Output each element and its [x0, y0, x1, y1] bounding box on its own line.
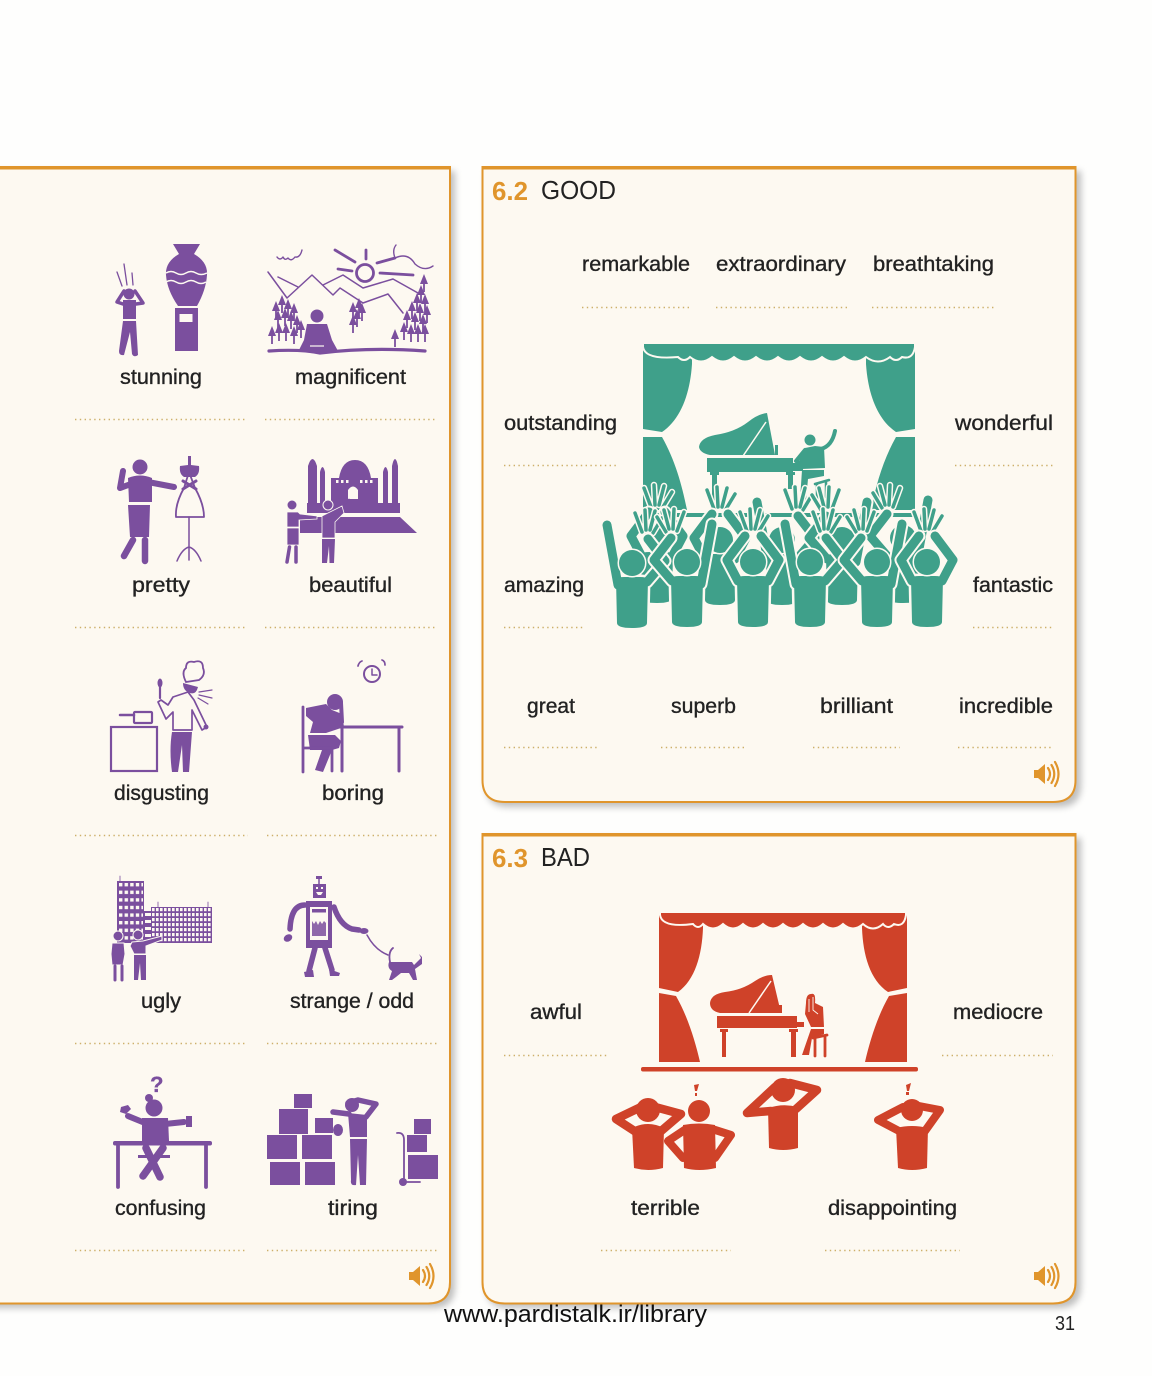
page number: 31: [1055, 1313, 1075, 1335]
panel: left vocabulary panel: [0, 166, 455, 1308]
grand piano: [699, 413, 803, 503]
word: disappointing: disappointing: [828, 1197, 957, 1220]
word: fantastic: fantastic: [973, 574, 1053, 597]
word: great: great: [527, 695, 575, 718]
audience member: hands on hips: [668, 1084, 731, 1170]
answer line: pretty: [75, 626, 247, 628]
pianist with head in hands: [802, 994, 827, 1056]
icon: confusing: ?: [150, 1072, 163, 1097]
illustration: applauded concert in green: [607, 343, 953, 628]
answer line: ugly: [75, 1042, 247, 1044]
panel: 6.2 GOOD: [482, 166, 1081, 807]
icon: tiring boxes and man: [267, 1094, 438, 1186]
icon: pretty: [120, 456, 204, 561]
answer line: outstanding: [504, 464, 617, 466]
stage floor: [640, 513, 916, 517]
icon: audio speaker: [1034, 1264, 1058, 1288]
word: amazing: amazing: [504, 574, 584, 597]
answer line: beautiful: [265, 626, 437, 628]
answer line: mediocre: [942, 1054, 1053, 1056]
audience: back row clapping: [631, 485, 928, 605]
answer line: fantastic: [973, 626, 1053, 628]
heading: 6.2 GOOD: [492, 175, 616, 206]
word: breathtaking: breathtaking: [873, 253, 994, 276]
label: ugly: ugly: [141, 990, 182, 1013]
icon: audio speaker: [1034, 762, 1058, 786]
icon: magnificent: [268, 245, 433, 354]
answer lines: bottom row: [504, 746, 1053, 748]
answer line: tiring: [267, 1250, 439, 1252]
icon: audio speaker left: [409, 1264, 434, 1288]
label: beautiful: beautiful: [309, 574, 392, 597]
heading: 6.2 GOOD: 6.2: [492, 176, 528, 206]
audience member: hands behind head: [616, 1098, 681, 1170]
answer line: awful: [504, 1054, 609, 1056]
word: terrible: terrible: [631, 1197, 700, 1220]
word: wonderful: wonderful: [954, 412, 1053, 435]
audience: front row clapping: [607, 509, 953, 628]
label: strange / odd: strange / odd: [290, 990, 414, 1013]
stage floor: [641, 1067, 918, 1072]
stage curtains: [643, 343, 915, 510]
answer line: terrible: [601, 1250, 731, 1252]
word: outstanding: outstanding: [504, 412, 617, 435]
valance: [643, 343, 915, 362]
illustration: disappointing concert in red: [616, 912, 940, 1170]
heading: 6.3 BAD: [492, 842, 590, 873]
answer line: confusing: [75, 1250, 247, 1252]
label: stunning: stunning: [120, 366, 202, 389]
icon: ugly: [111, 876, 212, 980]
heading: 6.3 BAD: BAD: [541, 842, 590, 872]
footer url: www.pardistalk.ir/library: [443, 1301, 707, 1328]
word: brilliant: brilliant: [820, 695, 893, 718]
stage curtains: [659, 912, 907, 1062]
audience member: hands behind head, right: [878, 1083, 940, 1170]
panel: 6.3 BAD: [482, 833, 1081, 1308]
answer line: boring: [267, 834, 439, 836]
answer line: wonderful: [955, 464, 1053, 466]
label: confusing: confusing: [115, 1197, 206, 1220]
answer line: disgusting: [75, 834, 248, 836]
audience member: hands behind head, centre: [747, 1078, 817, 1150]
answer line: strange / odd: [267, 1042, 439, 1044]
grand piano: [710, 975, 804, 1057]
label: pretty: pretty: [132, 574, 191, 597]
word: remarkable: remarkable: [582, 253, 690, 276]
icon: disgusting: [111, 661, 212, 772]
label: tiring: tiring: [328, 1197, 378, 1220]
valance: [660, 912, 906, 928]
icon: boring: [303, 660, 402, 772]
answer lines: top row: [582, 306, 994, 308]
heading: 6.3 BAD: 6.3: [492, 843, 528, 873]
answer line: stunning: [75, 418, 247, 420]
icon: strange / odd robot and dog: [282, 876, 422, 980]
word: mediocre: mediocre: [953, 1001, 1043, 1024]
pianist: [796, 431, 835, 500]
label: magnificent: magnificent: [295, 366, 406, 389]
heading: 6.2 GOOD: GOOD: [541, 175, 616, 205]
answer line: amazing: [504, 626, 584, 628]
word: awful: awful: [530, 1001, 582, 1024]
answer line: disappointing: [825, 1250, 960, 1252]
label: boring: boring: [322, 782, 384, 805]
word: superb: superb: [671, 695, 736, 718]
icon: confusing: [113, 1072, 212, 1187]
word: incredible: incredible: [959, 695, 1053, 718]
word: extraordinary: extraordinary: [716, 253, 847, 276]
icon: stunning: [117, 244, 207, 356]
answer line: magnificent: [265, 418, 437, 420]
icon: beautiful: [287, 459, 417, 563]
label: disgusting: disgusting: [114, 782, 209, 805]
